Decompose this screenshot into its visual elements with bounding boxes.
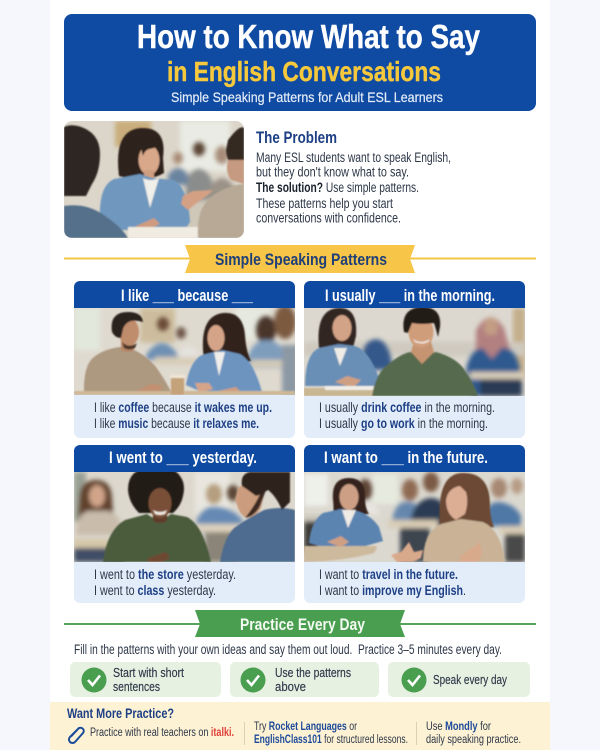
title: How to Know What to Say bbox=[137, 18, 481, 55]
footer link: mondly bbox=[426, 721, 521, 746]
pattern examples: I want to improve my English. bbox=[319, 583, 466, 598]
pattern examples: I usually drink coffee in the morning. bbox=[319, 400, 495, 415]
problem copy: The solution? Use simple patterns. bbox=[256, 180, 419, 195]
section banner: practice every day: Practice Every Day bbox=[240, 615, 365, 634]
pattern examples bbox=[319, 567, 466, 598]
icon: check bbox=[240, 668, 266, 692]
tip: use the patterns above: above bbox=[275, 679, 306, 694]
footer link: mondly: Use Mondly for bbox=[426, 721, 491, 733]
problem copy: Many ESL students want to speak English, bbox=[256, 150, 451, 165]
text block: the problem bbox=[256, 128, 451, 226]
photo: classroom conversation bbox=[64, 121, 244, 238]
tip: speak every day: Speak every day bbox=[433, 672, 507, 687]
photo: woman gesturing in class bbox=[304, 472, 525, 562]
pattern examples: I like music because it relaxes me. bbox=[94, 416, 259, 431]
pattern heading: I like ___ because ___ bbox=[121, 287, 254, 305]
panel: pattern card 4 bbox=[304, 445, 525, 603]
tip: start with short sentences bbox=[70, 662, 221, 697]
icon: check bbox=[402, 668, 426, 692]
header banner bbox=[64, 14, 536, 111]
footer link: rocket languages: Try Rocket Languages or bbox=[254, 721, 357, 733]
pattern heading: I usually ___ in the morning. bbox=[325, 287, 495, 305]
icon: paperclip link bbox=[69, 728, 84, 743]
pattern examples bbox=[94, 567, 236, 598]
pattern examples: I went to the store yesterday. bbox=[94, 567, 236, 582]
pattern heading: I went to ___ yesterday. bbox=[109, 449, 257, 467]
tip: start with short sentences: Start with short bbox=[113, 665, 184, 680]
footer link: mondly: daily speaking practice. bbox=[426, 734, 521, 746]
problem copy: These patterns help you start bbox=[256, 196, 393, 211]
footer panel: want more practice bbox=[50, 702, 550, 750]
section banner: practice every day bbox=[64, 610, 536, 637]
tagline: Simple Speaking Patterns for Adult ESL Learners bbox=[171, 89, 443, 105]
panel: pattern card 1 bbox=[74, 281, 298, 438]
pattern examples bbox=[319, 400, 495, 431]
icon: check bbox=[82, 668, 106, 692]
section banner: simple speaking patterns: Simple Speaking Patterns bbox=[215, 250, 387, 269]
footer link: rocket languages bbox=[254, 721, 408, 746]
pattern examples: I went to class yesterday. bbox=[94, 583, 216, 598]
tip: use the patterns above bbox=[230, 662, 379, 697]
problem copy bbox=[256, 150, 451, 226]
section banner: simple speaking patterns bbox=[64, 245, 536, 273]
photo: man and woman with coffee bbox=[74, 305, 298, 395]
heading: the problem: The Problem bbox=[256, 128, 337, 147]
tip: start with short sentences: sentences bbox=[113, 679, 160, 694]
footer heading: Want More Practice? bbox=[67, 705, 174, 721]
footer link: italki: Practice with real teachers on italki. bbox=[90, 727, 234, 739]
pattern examples bbox=[94, 400, 272, 431]
subtitle: yellow title line: in English Conversations bbox=[167, 56, 441, 87]
footer link: rocket languages: EnglishClass101 for structured lessons. bbox=[254, 734, 408, 746]
pattern examples: I usually go to work in the morning. bbox=[319, 416, 488, 431]
panel: pattern card 3 bbox=[74, 445, 295, 603]
tip: use the patterns above: Use the patterns bbox=[275, 665, 351, 680]
photo: smiling man in green shirt bbox=[304, 307, 525, 396]
problem copy: conversations with confidence. bbox=[256, 210, 401, 226]
pattern examples: I want to travel in the future. bbox=[319, 567, 458, 582]
tip: speak every day bbox=[388, 662, 530, 697]
pattern heading: I want to ___ in the future. bbox=[324, 449, 488, 467]
problem copy: but they don't know what to say. bbox=[256, 164, 409, 180]
pattern examples: I like coffee because it wakes me up. bbox=[94, 400, 272, 415]
panel: pattern card 2 bbox=[304, 281, 525, 438]
photo: woman with curly hair talking bbox=[74, 468, 295, 562]
